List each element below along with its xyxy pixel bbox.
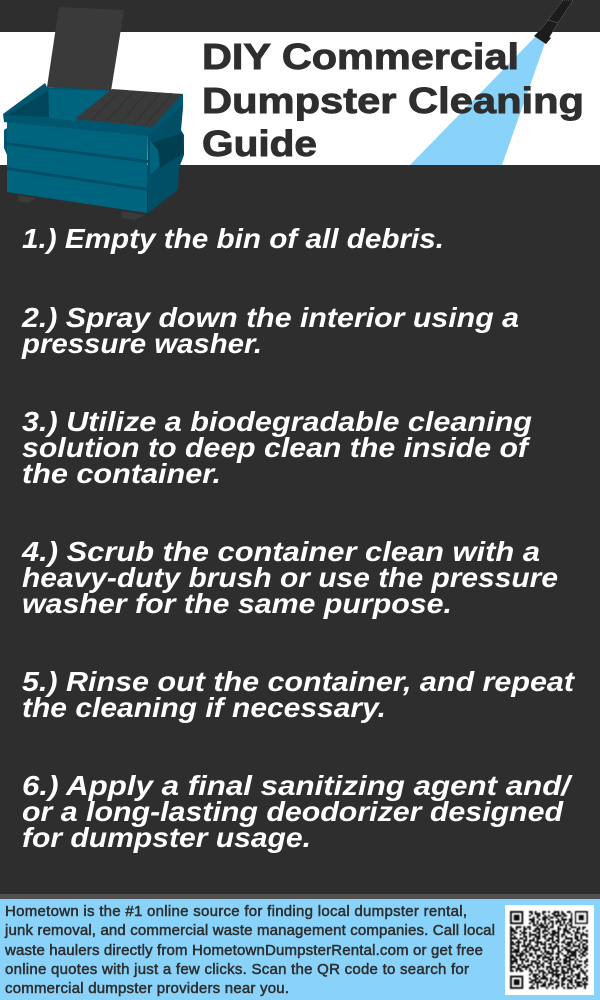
icon: pressure washer spray — [410, 0, 573, 165]
step 2: 2.) Spray down the interior using a — [21, 302, 519, 333]
step 2 — [21, 302, 519, 359]
step 1: 1.) Empty the bin of all debris. — [22, 223, 444, 254]
step 5: 5.) Rinse out the container, and repeat — [22, 666, 576, 697]
step 2: pressure washer. — [21, 328, 262, 359]
step 6: for dumpster usage. — [22, 822, 311, 853]
title: DIY Commercial — [202, 36, 519, 77]
step 3: solution to deep clean the inside of — [22, 432, 531, 463]
step 6: or a long-lasting deodorizer designed — [22, 796, 564, 827]
step 4: washer for the same purpose. — [22, 588, 452, 619]
step 5 — [22, 666, 576, 723]
icon: dumpster — [3, 7, 184, 220]
title — [202, 36, 584, 164]
step 5: the cleaning if necessary. — [22, 692, 386, 723]
title: Guide — [202, 123, 317, 164]
footer text — [4, 903, 495, 997]
step 3: 3.) Utilize a biodegradable cleaning — [22, 406, 532, 437]
footer text: waste haulers directly from HometownDumpsterRental.com or get free — [4, 942, 483, 959]
footer text: commercial dumpster providers near you. — [5, 980, 289, 997]
step 4: 4.) Scrub the container clean with a — [21, 536, 540, 567]
header band — [0, 32, 600, 165]
footer text: online quotes with just a few clicks. Scan the QR code to search for — [5, 961, 469, 978]
step 3: the container. — [22, 458, 221, 489]
footer text: junk removal, and commercial waste management companies. Call local — [4, 922, 495, 939]
footer panel — [0, 894, 600, 1000]
step 3 — [22, 406, 532, 489]
step 4 — [21, 536, 558, 619]
QR code — [505, 905, 594, 995]
step 6: 6.) Apply a final sanitizing agent and/ — [22, 770, 574, 801]
step 4: heavy-duty brush or use the pressure — [22, 562, 558, 593]
title: Dumpster Cleaning — [202, 80, 584, 121]
step 6 — [22, 770, 574, 853]
footer text: Hometown is the #1 online source for finding local dumpster rental, — [5, 903, 467, 920]
